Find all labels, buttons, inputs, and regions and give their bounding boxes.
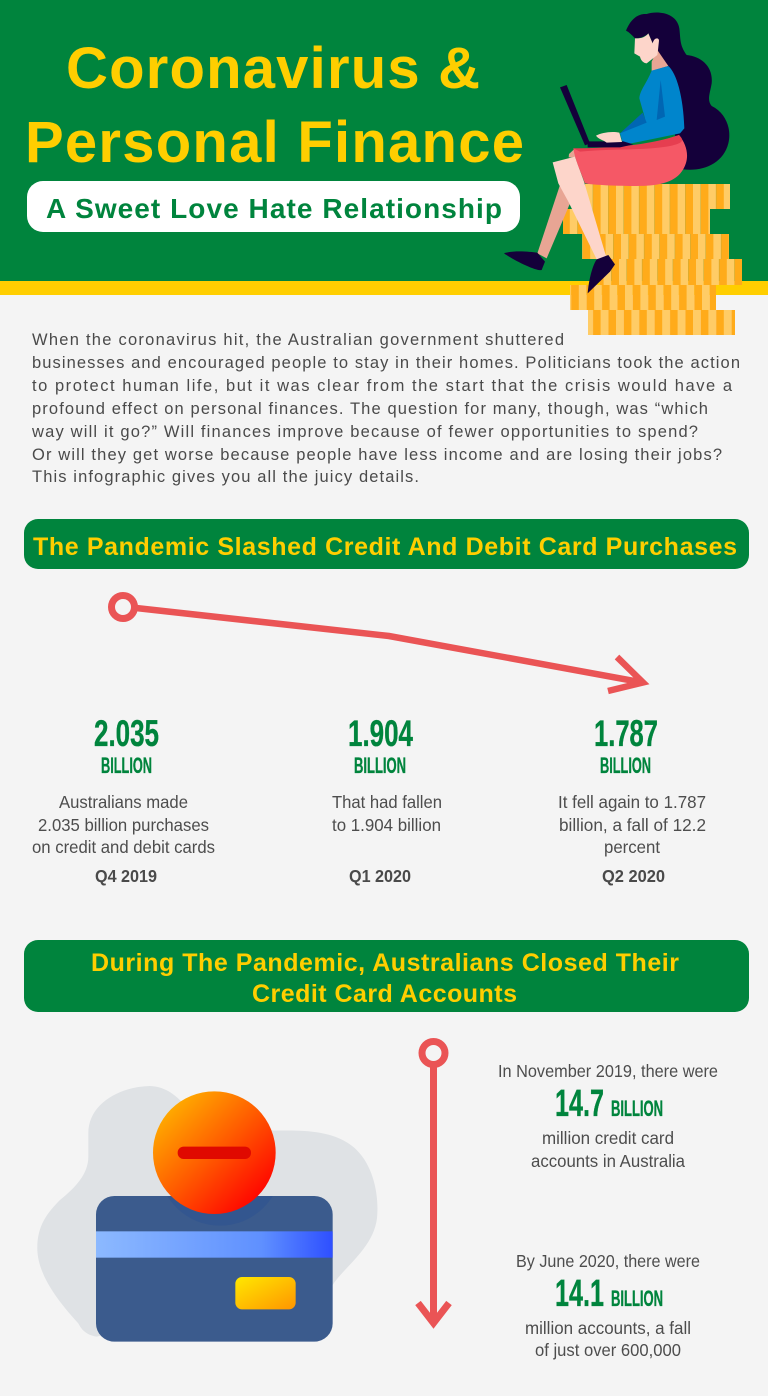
stat: Q2 2020: 1.787 xyxy=(594,713,658,754)
stat: Q4 2019: 2.035 xyxy=(94,713,159,754)
stat: November 2019 accounts: accounts in Australia xyxy=(531,1151,685,1171)
intro text block: When the coronavirus hit, the Australian government shuttered xyxy=(32,331,564,349)
stat: June 2020 accounts xyxy=(516,1251,700,1360)
stat: November 2019 accounts xyxy=(498,1061,718,1171)
stat: Q2 2020: percent xyxy=(604,837,660,857)
stat: Q4 2019: Australians made xyxy=(59,792,188,812)
subtitle pill: A Sweet Love Hate Relationship xyxy=(46,193,502,224)
intro text block: Or will they get worse because people have less income and are losing their jobs? xyxy=(32,446,722,464)
arrow: declining trend xyxy=(112,596,643,691)
intro text block: to protect human life, but it was clear from the start that the crisis would have a xyxy=(32,377,733,395)
stat: November 2019 accounts: million credit card xyxy=(542,1128,674,1148)
intro text block: profound effect on personal finances. The question for many, though, was “which xyxy=(32,400,708,418)
stat: June 2020 accounts: By June 2020, there were xyxy=(516,1251,700,1271)
icon: credit card with minus sign xyxy=(37,1086,377,1342)
stat: June 2020 accounts: BILLION xyxy=(611,1286,663,1311)
intro text block: way will it go?” Will finances improve because of fewer opportunities to spend? xyxy=(31,423,698,441)
stat: June 2020 accounts: million accounts, a fall xyxy=(525,1318,691,1338)
panel: header banner xyxy=(0,0,768,295)
stat: Q2 2020: BILLION xyxy=(600,753,651,778)
stat: Q2 2020 xyxy=(558,713,706,886)
title: Coronavirus & xyxy=(66,36,480,101)
stat: Q1 2020 xyxy=(332,713,442,886)
heading: card purchases: The Pandemic Slashed Credit And Debit Card Purchases xyxy=(33,533,737,561)
stat: November 2019 accounts: In November 2019, there were xyxy=(498,1061,718,1081)
intro text block: businesses and encouraged people to stay in their homes. Politicians took the action xyxy=(32,354,740,372)
stat: Q4 2019: Q4 2019 xyxy=(95,866,157,886)
stat: Q1 2020: Q1 2020 xyxy=(349,866,411,886)
stat: June 2020 accounts: 14.1 xyxy=(555,1273,604,1315)
heading: card purchases xyxy=(24,519,749,569)
stat: Q4 2019: on credit and debit cards xyxy=(32,837,215,857)
intro text block: This infographic gives you all the juicy details. xyxy=(32,468,419,486)
stat: Q4 2019: 2.035 billion purchases xyxy=(38,815,209,835)
stat: November 2019 accounts: 14.7 xyxy=(555,1083,604,1125)
subtitle pill xyxy=(27,181,520,232)
intro text block xyxy=(31,331,740,486)
stat: Q2 2020: Q2 2020 xyxy=(602,866,665,886)
stat: Q1 2020: 1.904 xyxy=(348,713,413,754)
stat: Q1 2020: BILLION xyxy=(354,753,406,778)
stat: Q4 2019: BILLION xyxy=(101,753,152,778)
stat: Q2 2020: It fell again to 1.787 xyxy=(558,792,706,812)
title: Personal Finance xyxy=(25,110,524,175)
stat: November 2019 accounts: BILLION xyxy=(611,1096,663,1121)
title xyxy=(25,36,524,175)
heading: closed accounts xyxy=(24,940,749,1012)
arrow: downward xyxy=(418,1042,449,1323)
stat: Q4 2019 xyxy=(32,713,215,886)
stat: Q2 2020: billion, a fall of 12.2 xyxy=(559,815,706,835)
stat: Q1 2020: That had fallen xyxy=(332,792,442,812)
stat: June 2020 accounts: of just over 600,000 xyxy=(535,1340,681,1360)
icon: stacks of gold coins xyxy=(563,184,742,335)
heading: closed accounts: Credit Card Accounts xyxy=(252,980,517,1008)
icon: woman with laptop xyxy=(504,13,729,293)
heading: closed accounts: During The Pandemic, Australians Closed Their xyxy=(91,949,679,977)
stat: Q1 2020: to 1.904 billion xyxy=(332,815,441,835)
